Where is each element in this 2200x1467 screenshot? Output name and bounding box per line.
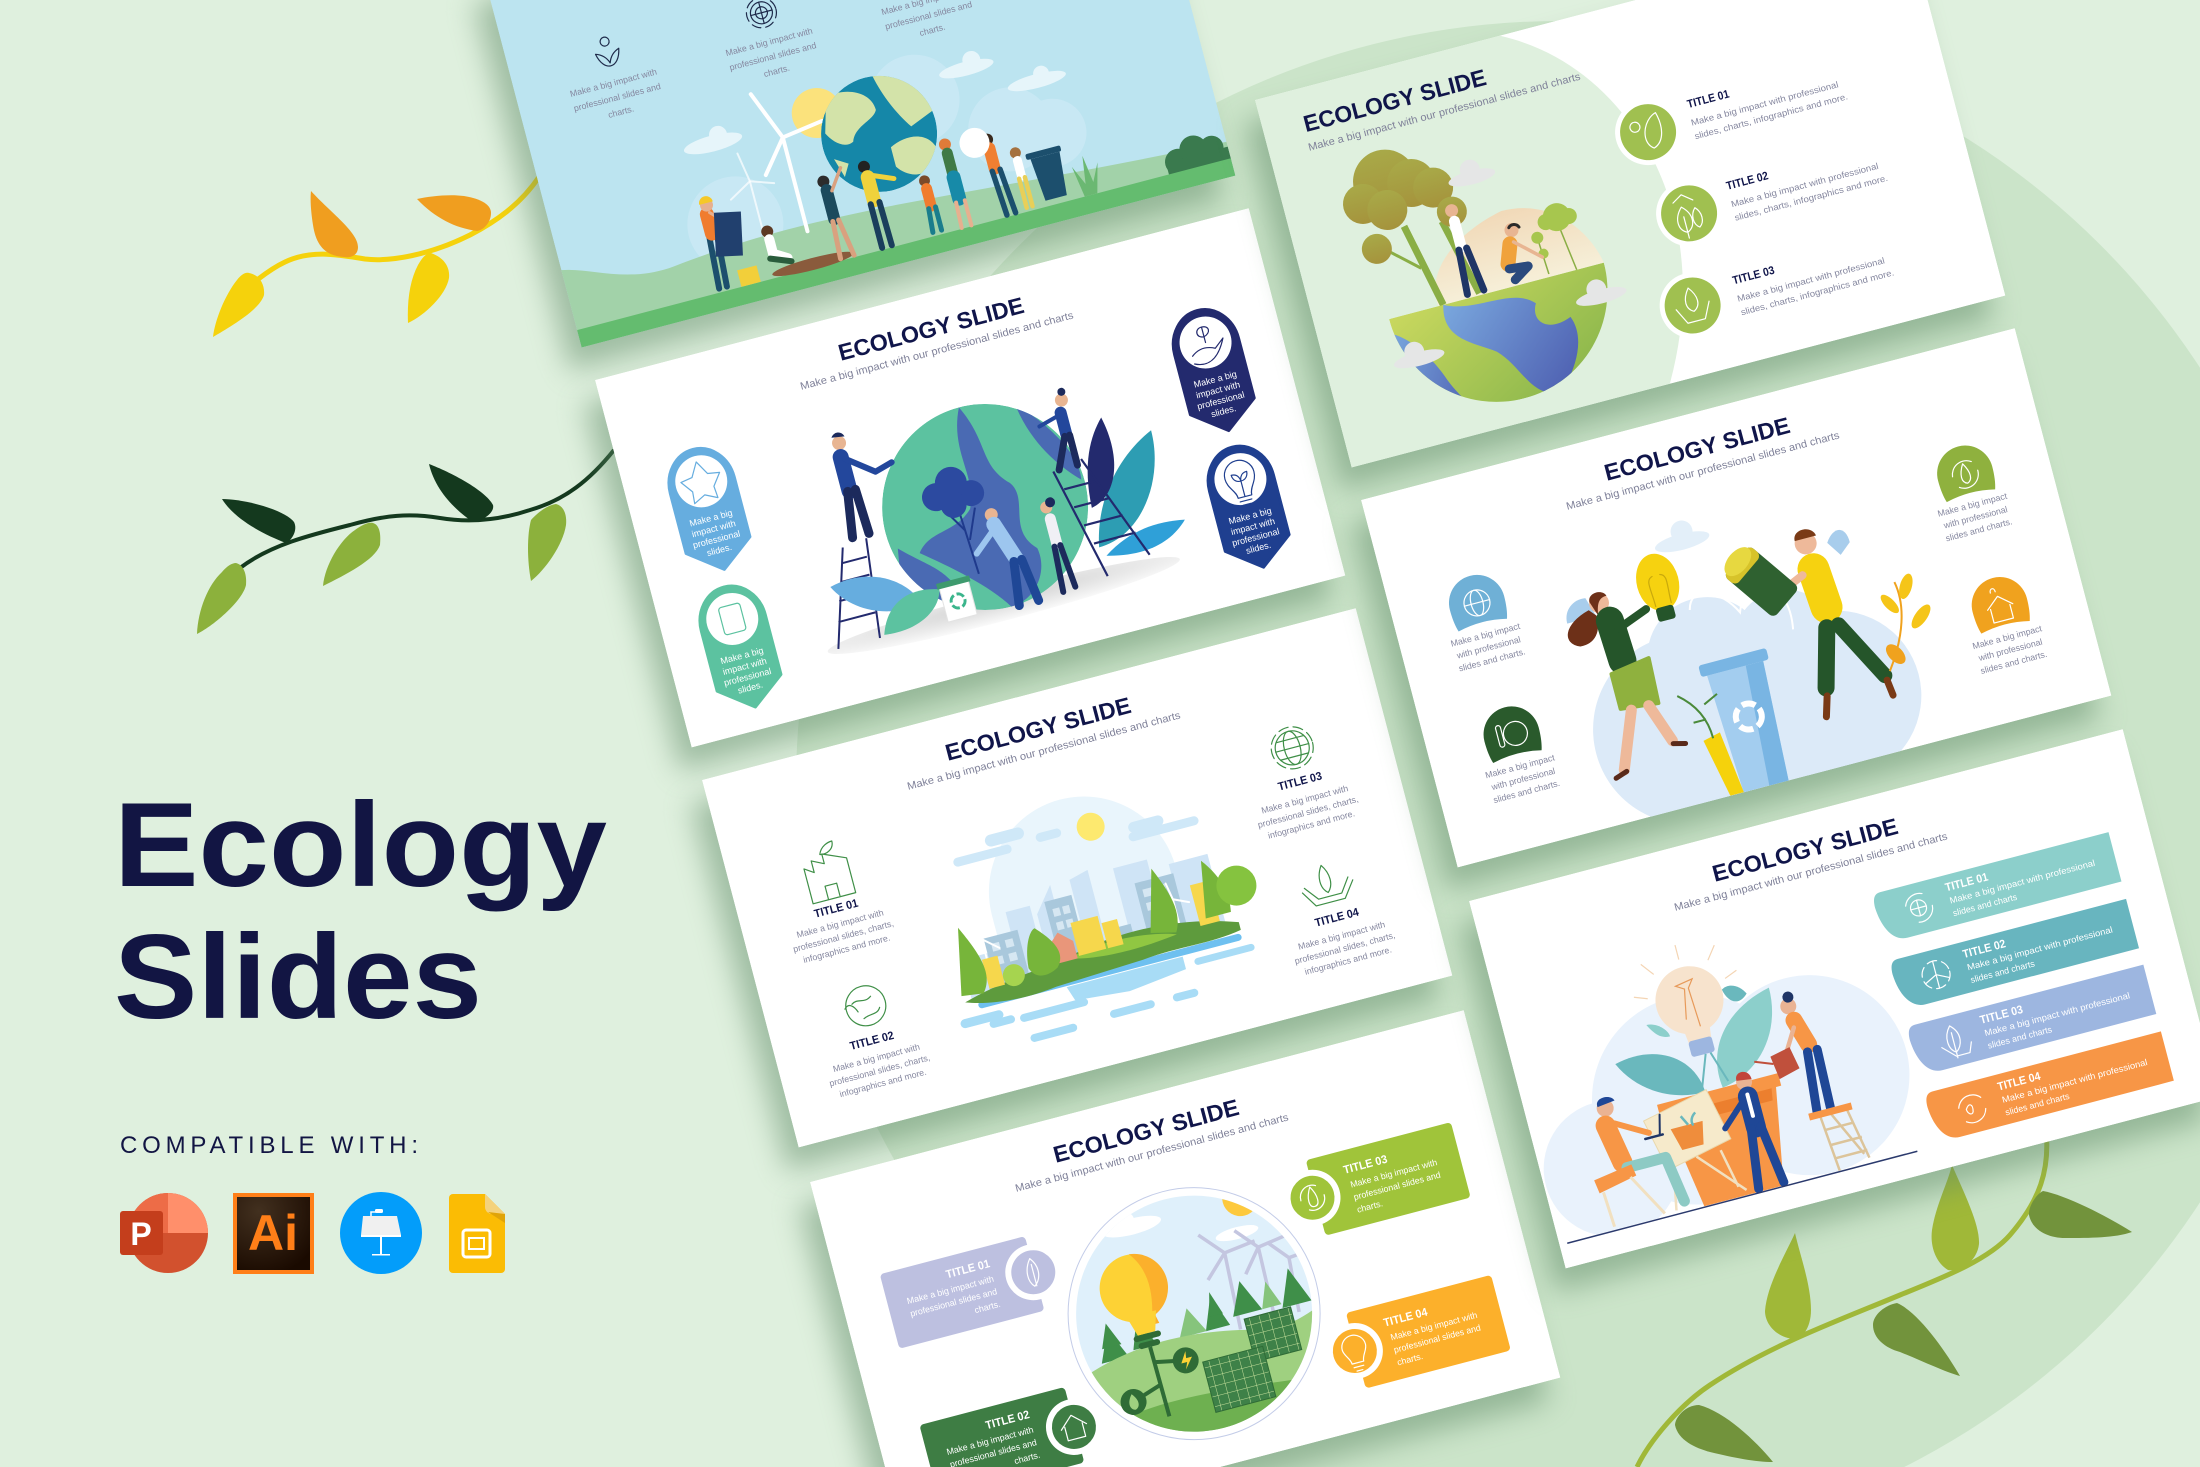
- houses: [977, 880, 1222, 989]
- sun: [792, 88, 835, 138]
- item 01: professional slides and: [909, 1286, 998, 1319]
- panel: slide renewable bulb: [794, 1010, 1565, 1467]
- bulb: [1084, 1244, 1211, 1428]
- item 01: Make a big impact with: [906, 1274, 995, 1306]
- item 04: TITLE 04: [1314, 906, 1361, 930]
- info column 2: charts.: [763, 63, 791, 79]
- item 04: professional slides and: [1393, 1322, 1482, 1355]
- title: Ecology: [114, 778, 607, 912]
- tag: light blue: slides.: [706, 542, 733, 558]
- icon: keynote: [340, 1192, 422, 1274]
- item 03: professional slides and: [1352, 1170, 1442, 1202]
- white clouds: [684, 51, 1066, 154]
- bulb: [1624, 932, 1755, 1068]
- crouching man: [1498, 217, 1546, 280]
- tag: navy: [1165, 302, 1261, 439]
- item climate: [1470, 698, 1563, 805]
- tag: teal: Make a big: [719, 645, 764, 666]
- item globe: Make a big impact: [1450, 621, 1522, 649]
- background hills: [1419, 189, 1604, 306]
- city buildings: [947, 839, 1228, 1001]
- item house: with professional: [1977, 637, 2043, 663]
- item 02: [919, 1380, 1110, 1467]
- item 04: infographics and more.: [1304, 944, 1393, 977]
- item 03: Make a big impact with: [1260, 783, 1349, 816]
- item water: [1923, 437, 2015, 544]
- ladder right: [1052, 448, 1152, 583]
- item water: slides and charts.: [1945, 516, 2013, 543]
- leaves bottom left: [830, 558, 947, 646]
- plant and vase: [1677, 686, 1744, 802]
- item house: Make a big impact: [1971, 623, 2043, 651]
- item globe: slides and charts.: [1458, 646, 1526, 673]
- tag: blue: slides.: [1245, 540, 1272, 556]
- item 03: [1276, 1122, 1471, 1244]
- ground strip: [577, 158, 1235, 348]
- bottom right vine: [1637, 1130, 2132, 1467]
- ladder left: [813, 538, 892, 649]
- item 03: charts.: [1356, 1198, 1384, 1215]
- subheading: Make a big impact with our professional slides and charts: [1307, 71, 1582, 154]
- info column 2: [726, 0, 816, 77]
- woman with bulb: [1559, 580, 1690, 781]
- tag: blue: professional: [1231, 526, 1280, 548]
- info column 3: charts.: [918, 22, 946, 38]
- bushes: [1165, 136, 1232, 174]
- yellow vine: [213, 177, 539, 337]
- man planting: [966, 502, 1039, 613]
- item 03: infographics and more.: [1267, 808, 1356, 841]
- ground shadow: [824, 545, 1184, 666]
- clouds: [1650, 514, 1711, 557]
- item climate: with professional: [1489, 766, 1556, 792]
- icon: illustrator: [233, 1193, 314, 1274]
- item 03: Make a big impact with professional: [1736, 255, 1886, 304]
- hills: [562, 142, 1236, 348]
- turbines: [963, 871, 1199, 996]
- item 03: [1236, 715, 1363, 843]
- battery: [1717, 540, 1800, 618]
- trees: [1331, 106, 1590, 323]
- tag: light blue: professional: [692, 528, 741, 550]
- bar 01: [1872, 832, 2121, 944]
- info column 1: Make a big impact with: [569, 67, 658, 99]
- item 01: infographics and more.: [802, 933, 891, 965]
- subheading: Make a big impact with our professional slides and charts: [799, 309, 1075, 393]
- wind turbines: [730, 92, 823, 238]
- item 04: Make a big impact with: [1389, 1310, 1479, 1342]
- woman: [1444, 202, 1484, 295]
- bar 02: TITLE 02: [1961, 938, 2007, 961]
- stool: [1593, 1159, 1665, 1229]
- trees: [942, 844, 1266, 1000]
- item 03: TITLE 03: [1342, 1154, 1389, 1177]
- circle scene: [1026, 1147, 1366, 1467]
- plant leaves: [1603, 976, 1790, 1113]
- item 02: slides, charts, infographics and more.: [1733, 173, 1889, 223]
- tag: light blue: Make a big: [688, 508, 733, 528]
- item house: [1957, 569, 2050, 676]
- panel: slide earth hemisphere: [1239, 0, 2010, 491]
- tag: teal: [692, 579, 787, 715]
- ground line: [1567, 1151, 1917, 1243]
- item 02: charts.: [1013, 1450, 1041, 1466]
- pale blobs: [1564, 548, 1941, 845]
- tag: navy: impact with: [1195, 379, 1241, 400]
- panel: slide green city: [686, 608, 1457, 1171]
- panel: slide hands on earth: [579, 208, 1350, 771]
- tag: teal: impact with: [722, 656, 768, 677]
- panel: slide recycling: [1345, 328, 2116, 891]
- tag: blue: [1200, 439, 1295, 576]
- info column 1: [570, 36, 661, 118]
- heading: ECOLOGY SLIDE: [1709, 813, 1901, 887]
- watering can and soil: [737, 252, 852, 287]
- grass: [1072, 156, 1098, 196]
- subheading: Make a big impact with our professional slides and charts: [1673, 830, 1949, 914]
- recycle bin: [1698, 648, 1801, 800]
- curved green panel: [1255, 4, 1715, 468]
- icon: illustrator: Ai: [248, 1205, 298, 1261]
- heading: ECOLOGY SLIDE: [942, 692, 1134, 766]
- woman helping: [1038, 496, 1078, 592]
- item 04: charts.: [1396, 1351, 1424, 1367]
- recycle bin: [1026, 146, 1067, 201]
- person watering: [1031, 387, 1085, 472]
- ladder: [1808, 1102, 1871, 1175]
- item 01: Make a big impact with professional: [1690, 79, 1839, 128]
- heading: ECOLOGY SLIDE: [1050, 1094, 1242, 1168]
- bar 03: [1906, 965, 2156, 1076]
- item 03: TITLE 03: [1277, 770, 1323, 793]
- recycle globe circle: [960, 128, 990, 158]
- leaves right: [1067, 404, 1190, 562]
- bar 01: slides and charts: [1952, 892, 2019, 918]
- item 04: [1318, 1275, 1511, 1396]
- item 04: [1273, 852, 1400, 979]
- tag: light blue: impact with: [691, 518, 737, 539]
- solar panel: [714, 212, 743, 257]
- bar 04: slides and charts: [2004, 1091, 2071, 1117]
- subheading: Make a big impact with our professional slides and charts: [1014, 1111, 1290, 1195]
- bar 04: TITLE 04: [1996, 1071, 2042, 1093]
- subheading: Make a big impact with our professional slides and charts: [906, 709, 1182, 793]
- item 02: infographics and more.: [838, 1067, 928, 1099]
- worker with solar panel: [699, 196, 730, 292]
- bar 01: Make a big impact with professional: [1948, 858, 2096, 906]
- item globe: [1435, 567, 1528, 674]
- item climate: Make a big impact: [1484, 752, 1556, 780]
- bar 04: [1924, 1031, 2174, 1143]
- info column 1: charts.: [607, 104, 635, 120]
- info column 3: professional slides and: [884, 0, 973, 32]
- item 01: TITLE 01: [945, 1258, 992, 1281]
- title: [114, 778, 607, 1044]
- heading: ECOLOGY SLIDE: [835, 292, 1027, 366]
- woman presenting: [1712, 1069, 1784, 1193]
- bar 02: slides and charts: [1969, 958, 2036, 985]
- item 02: Make a big impact with: [945, 1425, 1035, 1457]
- globe hemisphere: [1384, 256, 1639, 440]
- water: [958, 938, 1264, 1059]
- icon circle 02: [1649, 173, 1729, 254]
- info column 2: Make a big impact with: [725, 26, 814, 58]
- item 01: [1685, 59, 1849, 141]
- icon circle 03: [1652, 265, 1733, 346]
- crouching gardener: [760, 222, 792, 267]
- easel: [1640, 1086, 1747, 1213]
- item climate: slides and charts.: [1492, 778, 1561, 805]
- icon: powerpoint: [120, 1193, 208, 1273]
- bar 03: slides and charts: [1987, 1024, 2054, 1051]
- item 03: slides, charts, infographics and more.: [1740, 267, 1895, 317]
- clouds: [1348, 129, 1632, 372]
- icon circle 01: [1608, 92, 1688, 172]
- item 01: TITLE 01: [1686, 88, 1731, 111]
- item 03: Make a big impact with: [1349, 1157, 1438, 1190]
- light bulb: [1630, 549, 1688, 625]
- tag: navy: Make a big: [1193, 369, 1238, 390]
- item 04: TITLE 04: [1382, 1306, 1429, 1330]
- tag: teal: professional: [723, 666, 772, 688]
- yellow branch: [1864, 567, 1947, 672]
- tag: teal: slides.: [737, 680, 764, 696]
- item 02: Make a big impact with professional: [1730, 161, 1879, 209]
- item 01: TITLE 01: [813, 897, 860, 921]
- bar 03: TITLE 03: [1979, 1004, 2024, 1027]
- bar 01: TITLE 01: [1944, 871, 1990, 894]
- item 02: TITLE 02: [984, 1409, 1031, 1432]
- green vine: [197, 450, 614, 634]
- item 02: [808, 974, 934, 1101]
- item 02: TITLE 02: [1725, 170, 1770, 193]
- item 03: [1731, 235, 1895, 317]
- item globe: with professional: [1455, 634, 1522, 661]
- clouds: [949, 782, 1200, 887]
- sun: [1074, 810, 1108, 844]
- bar 04: Make a big impact with professional: [2001, 1057, 2148, 1105]
- tag: blue: impact with: [1230, 516, 1276, 537]
- item water: with professional: [1942, 504, 2009, 531]
- background circle: [796, 21, 2200, 1467]
- tag: navy: professional: [1196, 390, 1246, 412]
- man with battery: [1762, 518, 1894, 721]
- panel: slide team and bulb: [1453, 729, 2200, 1292]
- item 02: TITLE 02: [849, 1030, 895, 1053]
- person pruning: [826, 421, 908, 538]
- item 01: [880, 1229, 1071, 1349]
- item 02: Make a big impact with: [832, 1042, 921, 1074]
- flower pot: [1657, 1073, 1806, 1211]
- pale blobs: [1508, 943, 1934, 1252]
- item 02: professional slides, charts,: [828, 1052, 931, 1088]
- tag: navy: slides.: [1210, 403, 1237, 419]
- bar 03: Make a big impact with professional: [1983, 990, 2131, 1038]
- globe: [821, 76, 937, 192]
- item 04: professional slides, charts,: [1293, 930, 1396, 966]
- subheading: Make a big impact with our professional slides and charts: [1565, 429, 1841, 513]
- icon: google slides: [449, 1194, 505, 1273]
- item 03: TITLE 03: [1731, 265, 1776, 287]
- compatible with label: COMPATIBLE WITH:: [120, 1132, 418, 1159]
- sky circle: [968, 776, 1195, 990]
- heading: ECOLOGY SLIDE: [1301, 64, 1489, 137]
- bar 02: [1889, 899, 2139, 1010]
- heading: ECOLOGY SLIDE: [1601, 412, 1793, 486]
- item 04: Make a big impact with: [1297, 919, 1386, 952]
- solar panels: [1195, 1307, 1312, 1412]
- item 01: slides, charts, infographics and more.: [1693, 91, 1849, 141]
- recycle bin: [936, 575, 979, 623]
- item 01: [769, 831, 898, 967]
- item 02: [1725, 141, 1889, 223]
- info column 1: professional slides and: [573, 81, 662, 113]
- info column 2: professional slides and: [728, 40, 818, 73]
- watering can: [1753, 1047, 1799, 1083]
- icon: powerpoint: P: [130, 1216, 152, 1252]
- globe: [859, 381, 1111, 633]
- pale clouds behind globe: [688, 55, 1086, 256]
- title: Slides: [114, 910, 482, 1044]
- item 01: professional slides, charts,: [792, 918, 895, 954]
- bar 02: Make a big impact with professional: [1966, 925, 2114, 972]
- people holding globe: [815, 120, 1036, 260]
- seated man with laptop: [1594, 1084, 1684, 1217]
- island: [959, 905, 1243, 1012]
- item 01: charts.: [973, 1299, 1001, 1315]
- tag: light blue: [667, 446, 752, 571]
- item 01: Make a big impact with: [796, 907, 885, 940]
- tag: blue: Make a big: [1228, 505, 1273, 526]
- item water: Make a big impact: [1936, 491, 2009, 519]
- item house: slides and charts.: [1979, 649, 2048, 676]
- woman on ladder: [1771, 988, 1832, 1115]
- item 03: professional slides, charts,: [1257, 794, 1359, 830]
- young tree on globe: [916, 460, 1004, 583]
- panel: slide people holding globe: [469, 0, 1240, 371]
